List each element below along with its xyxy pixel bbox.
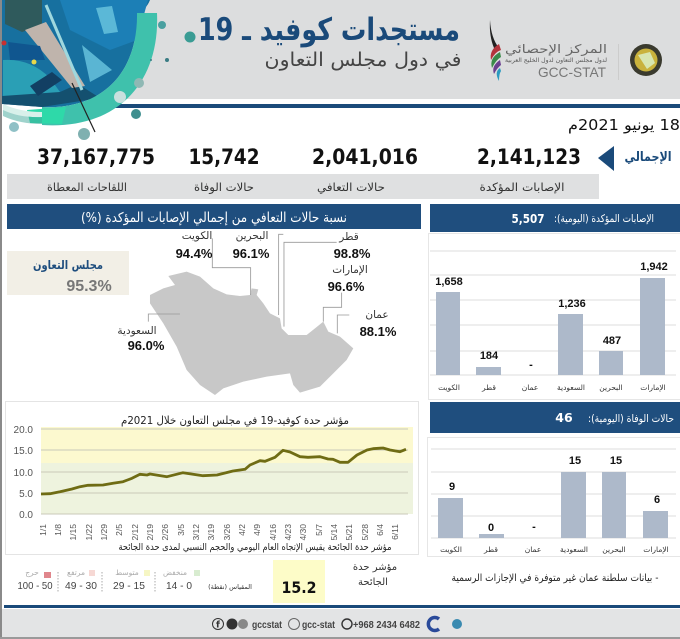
- severity index line chart: 4/9: [252, 524, 262, 536]
- stat: vaccines: 37,167,775: [37, 145, 155, 169]
- severity index label: [353, 562, 397, 588]
- header band: [2, 0, 680, 108]
- daily deaths heading: [430, 402, 680, 433]
- map label: Kuwait: الكويت: [182, 230, 212, 242]
- daily deaths bar chart: 15: [569, 455, 581, 467]
- map label: Saudi: 96.0%: [128, 338, 165, 353]
- scale: high: مرتفع: [67, 568, 85, 577]
- stat: confirmed: 2,141,123: [477, 145, 581, 169]
- footer social contacts: f: [216, 620, 220, 630]
- daily cases bar chart: 1,942: [640, 261, 668, 273]
- stats band: [7, 174, 599, 199]
- logo: GCC-STAT: لدول مجلس التعاون لدول الخليج العربية: [505, 57, 607, 64]
- totals: stats row: [7, 145, 672, 199]
- daily deaths bar chart: البحرين: [602, 545, 626, 554]
- daily deaths bar chart: السعودية: [560, 545, 588, 554]
- severity index line chart: 6/11: [390, 524, 400, 540]
- daily deaths heading: 46: [555, 410, 573, 425]
- scale: low: 14 - 0: [166, 580, 192, 592]
- severity index line chart: 1/29: [99, 524, 109, 541]
- daily deaths bar chart: 6: [654, 494, 660, 506]
- severity index line chart: 5/7: [314, 524, 324, 536]
- severity index line chart: 5/14: [329, 524, 339, 541]
- logo: GCC-STAT: [490, 20, 607, 81]
- severity index line chart: 0.0: [19, 510, 33, 521]
- daily cases heading: الإصابات المؤكدة (اليومية):: [554, 213, 654, 225]
- footer social contacts: gcc-stat: [302, 620, 336, 631]
- daily cases heading: 5,507: [512, 212, 544, 226]
- daily cases bar chart: البحرين: [599, 383, 623, 392]
- map of GCC: [148, 234, 353, 395]
- stat: vaccines: اللقاحات المعطاة: [47, 180, 127, 194]
- severity index line chart: 1/1: [38, 524, 48, 536]
- severity index line chart: 5.0: [19, 489, 33, 500]
- severity scale legend: [18, 568, 252, 592]
- footer band: [0, 605, 680, 639]
- severity index value: 15.2: [282, 578, 316, 597]
- daily cases heading: [430, 204, 680, 232]
- Oman data note: - بيانات سلطنة عمان غير متوفرة في الإجازات الرسمية: [452, 573, 659, 584]
- header artwork: medical circle: [2, 0, 196, 140]
- severity index line chart: [6, 402, 418, 554]
- severity index line chart: 5/28: [360, 524, 370, 541]
- daily cases bar chart: 1,236: [558, 298, 586, 310]
- daily deaths bar chart: -: [532, 521, 536, 533]
- daily deaths bar chart: 15: [610, 455, 622, 467]
- severity index line chart: 3/5: [176, 524, 186, 536]
- scale: high: [65, 568, 97, 592]
- map label: Kuwait: [176, 230, 213, 261]
- logo: GCC emblem: [618, 44, 662, 80]
- scale: medium: [113, 568, 150, 592]
- map label: Oman: [360, 309, 397, 339]
- title: في دول مجلس التعاون: [264, 49, 462, 71]
- map label: UAE: [328, 264, 368, 294]
- severity index line chart: 2/19: [145, 524, 155, 541]
- map label: Kuwait: 94.4%: [176, 246, 213, 261]
- map label: Qatar: 98.8%: [334, 246, 371, 261]
- scale: critical: [18, 568, 53, 592]
- title: [198, 12, 462, 71]
- severity index line chart: 2/5: [114, 524, 124, 536]
- stat: recovered: [312, 145, 418, 194]
- severity index line chart: 2/26: [160, 524, 170, 541]
- severity index line chart: 4/2: [237, 524, 247, 536]
- severity index line chart: 10.0: [14, 468, 33, 479]
- daily cases bar chart: 184: [480, 350, 499, 362]
- map label: Bahrain: 96.1%: [233, 246, 270, 261]
- severity index line chart: 3/12: [191, 524, 201, 541]
- map panel heading: [7, 204, 421, 229]
- date: 18 يونيو 2021م: [568, 116, 680, 134]
- map label: Bahrain: [233, 230, 270, 261]
- daily deaths bar chart: الإمارات: [643, 545, 669, 554]
- daily cases bar chart: السعودية: [557, 383, 585, 392]
- severity index line chart: 1/8: [53, 524, 63, 536]
- daily deaths bar chart: عمان: [525, 545, 541, 554]
- severity index value: [273, 560, 325, 603]
- total label: الإجمالي: [624, 150, 672, 165]
- scale: high: 49 - 30: [65, 580, 97, 592]
- title: مستجدات كوفيد ـ 19: [198, 12, 460, 48]
- severity index line chart: 4/30: [298, 524, 308, 541]
- chart title: مؤشر حدة كوفيد-19 في مجلس التعاون خلال 2021م: [121, 414, 349, 427]
- scale: critical: 100 - 50: [18, 580, 53, 592]
- GCC average box: مجلس التعاون: [33, 258, 103, 273]
- map label: UAE: الإمارات: [332, 264, 368, 276]
- scale: medium: متوسط: [115, 568, 139, 577]
- logo: GCC-STAT: GCC-STAT: [538, 64, 606, 80]
- severity index line chart: 20.0: [14, 425, 33, 436]
- scale: critical: حرج: [25, 568, 39, 577]
- map label: Oman: عمان: [365, 309, 389, 321]
- daily deaths bar chart: 9: [449, 481, 455, 493]
- scale: low: [163, 568, 200, 592]
- daily cases bar chart: 1,658: [435, 276, 463, 288]
- GCC average box: 95.3%: [66, 278, 112, 295]
- scale: low: منخفض: [163, 568, 187, 577]
- footer social contacts: gccstat: [252, 620, 283, 631]
- map label: UAE: 96.6%: [328, 279, 365, 294]
- footer social contacts: [212, 618, 462, 631]
- map label: Bahrain: البحرين: [236, 230, 268, 242]
- stat: recovered: حالات التعافي: [317, 180, 385, 194]
- stat: vaccines: [37, 145, 155, 194]
- severity scale legend: المقياس (نقطة): [208, 583, 252, 591]
- stat: confirmed: الإصابات المؤكدة: [480, 180, 564, 195]
- stat: confirmed: [477, 145, 581, 195]
- severity index label: مؤشر حدة: [353, 562, 397, 573]
- daily cases bar chart: الإمارات: [640, 383, 666, 392]
- stat: deaths: [188, 145, 260, 195]
- severity index line chart: 3/19: [206, 524, 216, 541]
- map label: Oman: 88.1%: [360, 324, 397, 339]
- map label: Saudi: [117, 325, 165, 353]
- map label: Saudi: السعودية: [117, 325, 157, 337]
- severity index line chart: 5/21: [344, 524, 354, 541]
- stat: recovered: 2,041,016: [312, 145, 418, 169]
- chart caption: مؤشر حدة الجائحة يقيس الإتجاه العام اليومي والحجم النسبي لمدى حدة الجائحة: [118, 542, 392, 553]
- daily deaths bar chart: الكويت: [440, 545, 462, 554]
- severity index line chart: 4/16: [268, 524, 278, 541]
- footer social contacts: +968 2434 6482: [353, 620, 420, 631]
- daily cases bar chart: 487: [603, 335, 621, 347]
- severity index label: الجائحة: [358, 577, 388, 588]
- severity index line chart: 1/15: [68, 524, 78, 541]
- severity index line chart: 2/12: [130, 524, 140, 541]
- stat: deaths: 15,742: [188, 145, 260, 169]
- daily cases bar chart: عمان: [522, 383, 538, 392]
- severity index line chart: 15.0: [14, 446, 33, 457]
- daily deaths bar chart: [428, 438, 680, 556]
- scale: medium: 29 - 15: [113, 580, 145, 592]
- map label: Qatar: [334, 231, 371, 261]
- severity index line chart: 6/4: [375, 524, 385, 536]
- map panel heading: نسبة حالات التعافي من إجمالي الإصابات المؤكدة (%): [81, 210, 347, 226]
- severity index line chart: 4/23: [283, 524, 293, 541]
- daily deaths bar chart: قطر: [483, 545, 498, 554]
- daily cases bar chart: قطر: [481, 383, 496, 392]
- logo: GCC-STAT: المركز الإحصائي: [505, 42, 607, 57]
- GCC average box: [7, 251, 129, 295]
- stat: deaths: حالات الوفاة: [194, 180, 254, 195]
- daily cases bar chart: -: [529, 359, 533, 371]
- daily cases bar chart: [428, 234, 680, 400]
- arrow: [598, 146, 614, 171]
- severity index line chart: 3/26: [222, 524, 232, 541]
- severity index line chart: 1/22: [84, 524, 94, 541]
- map label: Qatar: قطر: [338, 231, 359, 243]
- daily cases bar chart: الكويت: [438, 383, 460, 392]
- daily deaths bar chart: 0: [488, 522, 494, 534]
